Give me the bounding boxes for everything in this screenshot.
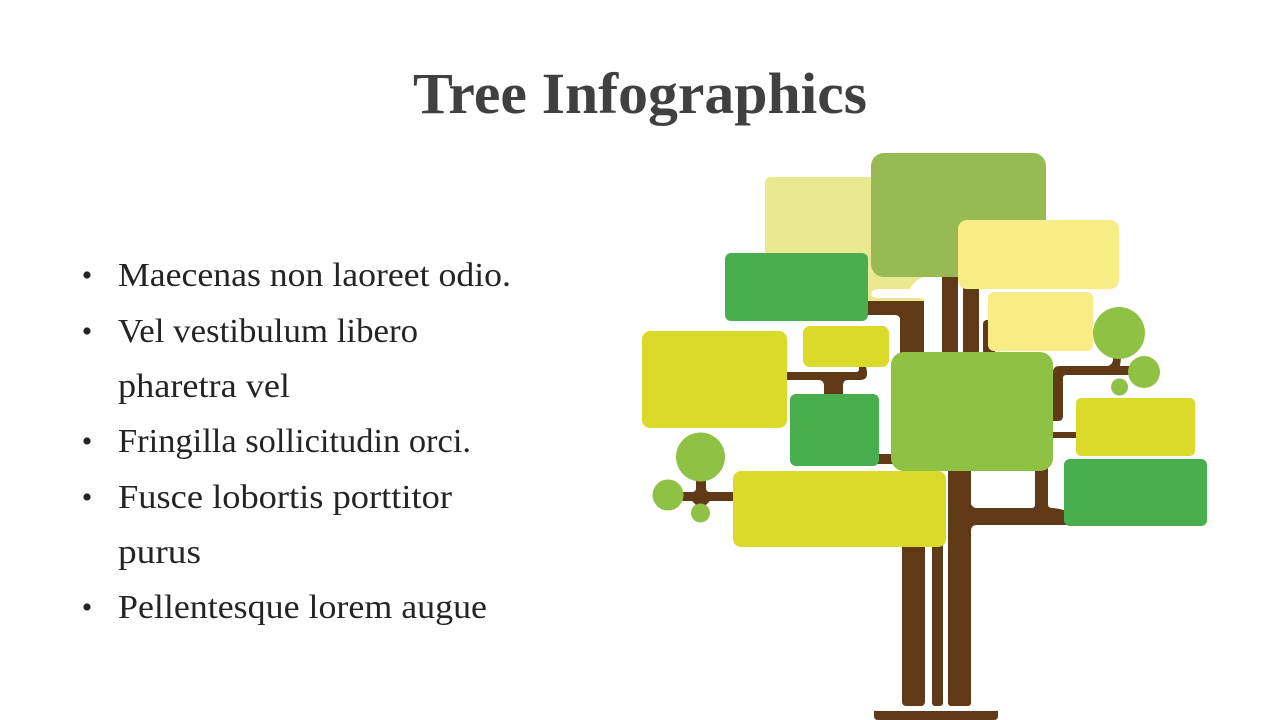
bullet list: purus xyxy=(118,534,201,571)
leaf: pale yellow upper block xyxy=(958,220,1119,289)
leaf: large yellow left block xyxy=(642,331,787,428)
bullet list xyxy=(83,257,511,626)
bullet list: Pellentesque lorem augue xyxy=(118,589,487,626)
leaf: green upper left block xyxy=(725,253,868,321)
small right tree crown xyxy=(1093,307,1160,396)
bullet list: pharetra vel xyxy=(118,368,290,405)
bullet list: Fusce lobortis porttitor xyxy=(118,479,453,516)
leaf: small yellow block xyxy=(803,326,889,367)
small left tree crown xyxy=(652,432,725,522)
leaf: green centre left block xyxy=(790,394,879,466)
tree illustration xyxy=(642,153,1207,720)
bullet list: Fringilla sollicitudin orci. xyxy=(118,423,471,460)
leaf: pale yellow middle block xyxy=(988,292,1093,351)
title: Tree Infographics xyxy=(413,61,867,126)
leaf: yellow lower block xyxy=(733,471,946,547)
bullet list: Vel vestibulum libero xyxy=(118,313,418,350)
tree trunk and branches xyxy=(680,270,1134,720)
leaf: central light green block xyxy=(891,352,1053,471)
leaf: pale back block xyxy=(765,177,924,301)
leaf: yellow right block xyxy=(1076,398,1195,456)
leaf: olive top block xyxy=(871,153,1046,277)
leaf: green lower right block xyxy=(1064,459,1207,526)
bullet list: Maecenas non laoreet odio. xyxy=(118,257,511,294)
